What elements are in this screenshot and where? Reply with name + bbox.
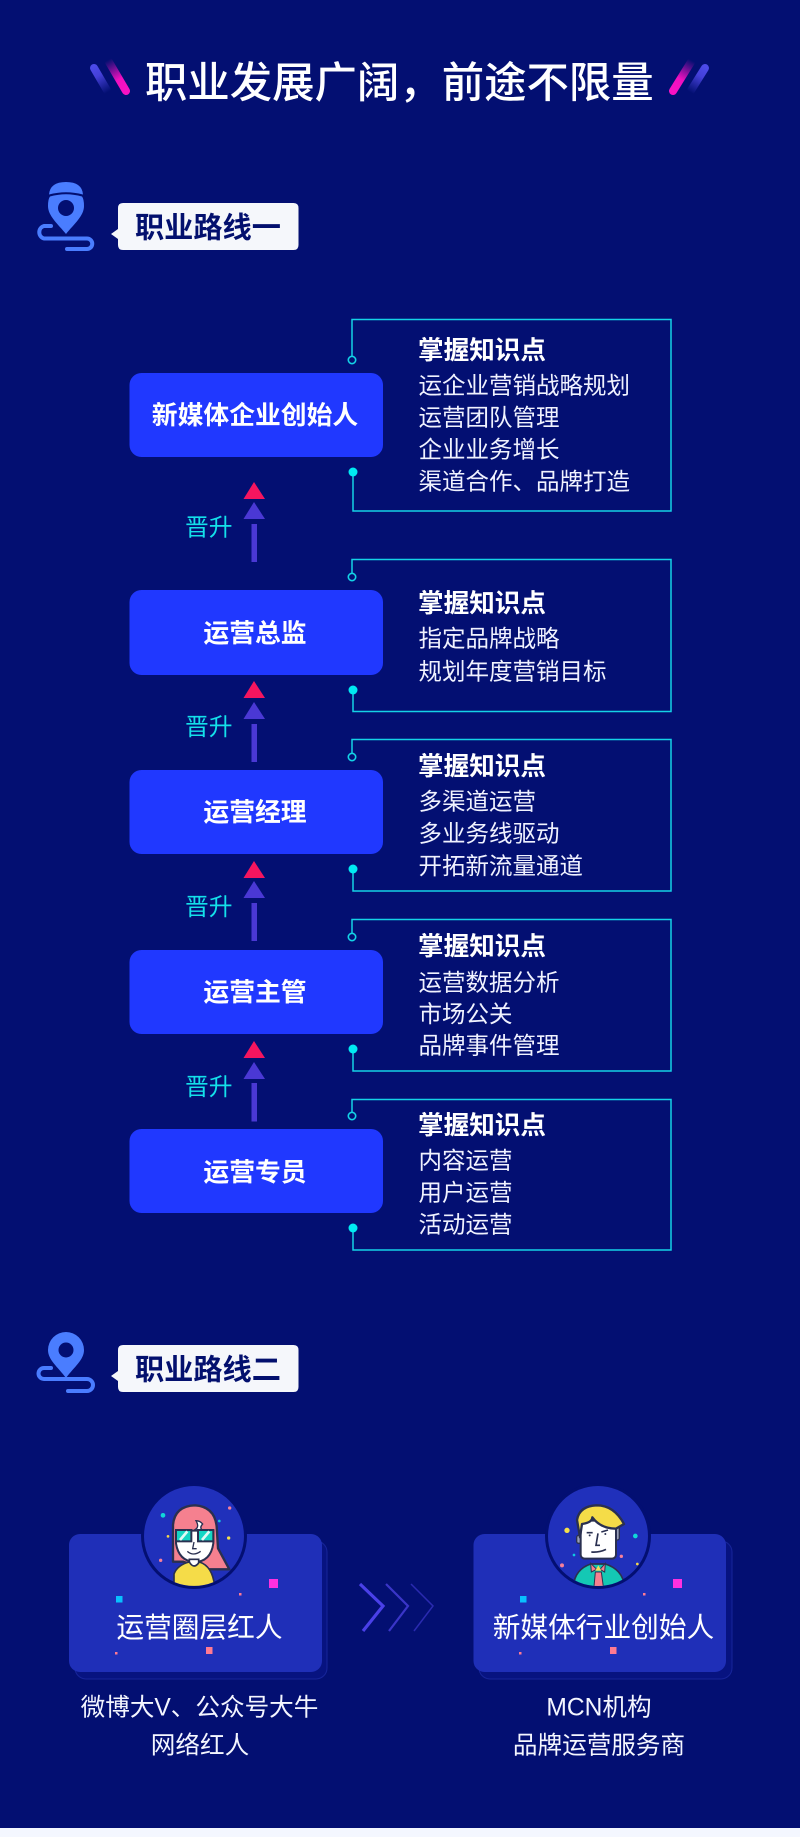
card: 运营圈层红人 [69,1483,327,1760]
decorative confetti [673,1579,682,1588]
card body [474,1534,726,1672]
level: 新媒体企业创始人 [130,320,671,511]
level: 运营主管: 运营主管 [203,978,307,1007]
level: 运营主管: 品牌事件管理 [418,1032,560,1058]
level: 运营专员: 掌握知识点 [418,1111,546,1140]
arrow: promotion 2: 晋升 [185,714,233,741]
card description: 网络红人 [151,1732,249,1760]
arrow: promotion 4 [185,1041,265,1122]
level: 运营专员 [130,1100,671,1250]
card shadow [75,1541,327,1679]
arrow: promotion 1: 晋升 [185,514,233,542]
label: 职业路线一 [111,203,298,250]
level: 运营经理 [130,740,671,891]
knowledge list: 掌握知识点 [418,336,546,365]
arrow: promotion 3 [185,861,265,941]
level: 运营总监: 指定品牌战略 [418,626,560,652]
card description: 品牌运营服务商 [513,1732,685,1760]
level: 新媒体企业创始人: 运企业营销战略规划 [418,372,630,398]
icon: location pin with hat [39,182,92,249]
arrow: promotion 4: 晋升 [185,1074,233,1101]
level: 运营经理: 多渠道运营 [418,788,536,814]
role box [130,373,383,457]
card description: MCN机构 [546,1694,652,1722]
section header: route two [38,1332,298,1392]
title text: 职业发展广阔，前途不限量 [145,60,654,106]
arrow: promotion 2 [185,681,265,762]
title slashes left [94,62,126,92]
level: 运营经理: 多业务线驱动 [418,820,560,846]
card title: 运营圈层红人 [116,1612,283,1643]
icon: location pin [38,1332,93,1391]
arrow: promotion 3: 晋升 [185,894,233,921]
card description [81,1694,318,1760]
label: 职业路线二 [111,1345,298,1392]
career ladder [130,320,671,1250]
level: 运营总监 [130,560,671,712]
card shadow [479,1541,732,1679]
card title: 新媒体行业创始人 [493,1612,714,1643]
level: 运营专员: 运营专员 [203,1158,307,1187]
knowledge panel frame [352,320,671,511]
level: 运营总监: 规划年度营销目标 [418,658,606,684]
arrow: promotion 1 [185,482,265,562]
level: 运营专员: 内容运营 [418,1148,512,1174]
card: 新媒体行业创始人 [474,1483,732,1760]
level: 新媒体企业创始人: 企业业务增长 [418,436,560,462]
level: 新媒体企业创始人: 运营团队管理 [418,404,560,430]
avatar: girl with glasses [141,1483,247,1589]
level: 运营经理: 掌握知识点 [418,752,546,781]
level: 运营主管: 市场公关 [418,1001,512,1027]
title slashes right [673,62,705,92]
level: 新媒体企业创始人: 新媒体企业创始人 [152,401,358,430]
card description: 微博大V、公众号大牛 [81,1694,318,1722]
arrow: chevrons [360,1584,433,1631]
level: 运营主管 [130,920,671,1071]
avatar: man with yellow hair [545,1483,651,1589]
label: 职业路线二: 职业路线二 [135,1354,281,1386]
bottom white strip [0,1828,800,1837]
title [94,60,705,106]
section header: route one [39,182,298,250]
level: 运营专员: 用户运营 [418,1180,512,1206]
card body [69,1534,322,1672]
level: 运营总监: 掌握知识点 [418,589,546,618]
level: 运营专员: 活动运营 [418,1212,512,1238]
level: 新媒体企业创始人: 渠道合作、品牌打造 [418,468,630,494]
level: 运营经理: 运营经理 [203,798,307,827]
label: 职业路线一: 职业路线一 [135,212,281,244]
level: 运营主管: 运营数据分析 [418,970,560,996]
level: 运营经理: 开拓新流量通道 [418,853,583,879]
level: 运营主管: 掌握知识点 [418,932,546,961]
level: 运营总监: 运营总监 [203,619,307,648]
decorative confetti [269,1579,278,1588]
card description [513,1694,685,1760]
